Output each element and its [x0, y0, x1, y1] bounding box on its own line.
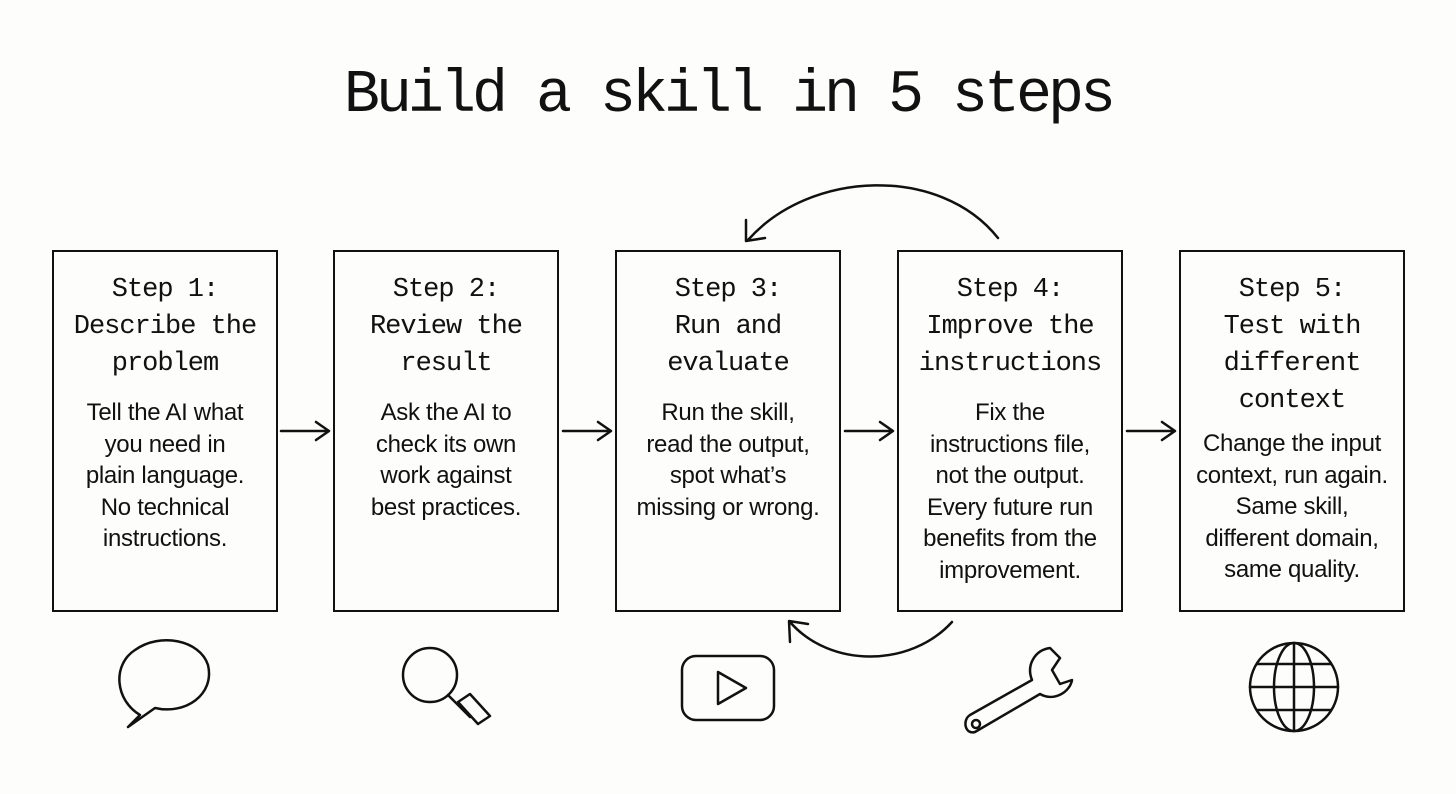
panel: step 3: missing or wrong.: [637, 494, 819, 520]
panel: step 4: [897, 250, 1123, 612]
panel: step 5: same quality.: [1224, 556, 1360, 583]
panel: step 5: different domain,: [1205, 524, 1379, 552]
arrow: loop bottom: [789, 621, 952, 656]
panel: step 3: Step 3:: [675, 275, 781, 305]
panel: step 4: instructions: [919, 349, 1101, 379]
panel: step 3: evaluate: [667, 349, 789, 379]
title: Build a skill in 5 steps: [344, 62, 1112, 130]
panel: step 1: problem: [112, 349, 218, 379]
panel: step 2: Ask the AI to: [381, 399, 511, 426]
panel: step 3: [615, 250, 841, 612]
panel: step 1: you need in: [105, 430, 225, 458]
panel: step 2: best practices.: [371, 494, 521, 520]
panel: step 5: context: [1239, 386, 1345, 416]
icon: globe: [1250, 643, 1338, 731]
icon: magnifier: [403, 648, 490, 724]
panel: step 4: improvement.: [939, 556, 1081, 584]
icon: play: [682, 656, 774, 720]
panel: step 1: instructions.: [103, 525, 227, 552]
panel: step 5: context, run again.: [1196, 462, 1388, 488]
panel: step 3: read the output,: [646, 430, 810, 458]
arrow: loop back top: [746, 185, 998, 241]
panel: step 2: [333, 250, 559, 612]
panel: step 4: Improve the: [926, 312, 1094, 342]
arrow 1-2: [281, 422, 329, 440]
panel: step 2: Step 2:: [393, 275, 499, 305]
panel: step 3: Run and: [675, 312, 781, 342]
panel: step 2: Review the: [370, 312, 522, 342]
panel: step 4: Fix the: [975, 399, 1045, 426]
panel: step 2: work against: [380, 462, 512, 489]
panel: step 4: not the output.: [936, 462, 1084, 489]
panel: step 1: [52, 250, 278, 612]
arrow 2-3: [563, 422, 611, 440]
arrow 4-5: [1127, 422, 1175, 440]
panel: step 5: Step 5:: [1239, 275, 1345, 305]
panel: step 3: spot what’s: [670, 462, 786, 489]
panel: step 5: different: [1224, 349, 1360, 379]
panel: step 2: result: [400, 349, 492, 379]
icon: speech bubble: [119, 640, 209, 727]
panel: step 2: check its own: [376, 430, 516, 458]
panel: step 5: Same skill,: [1236, 493, 1348, 520]
panel: step 1: Tell the AI what: [87, 399, 243, 426]
panel: step 1: Describe the: [74, 312, 256, 342]
icon: wrench: [965, 648, 1072, 732]
panel: step 4: instructions file,: [930, 430, 1090, 458]
panel: step 5: [1179, 250, 1405, 612]
panel: step 1: Step 1:: [112, 275, 218, 305]
panel: step 4: Every future run: [927, 494, 1093, 520]
panel: step 4: Step 4:: [957, 275, 1063, 305]
panel: step 3: Run the skill,: [661, 399, 795, 426]
arrow 3-4: [845, 422, 893, 440]
panel: step 4: benefits from the: [923, 525, 1097, 552]
panel: step 5: Change the input: [1203, 430, 1381, 457]
panel: step 1: No technical: [101, 494, 229, 520]
panel: step 5: Test with: [1224, 312, 1360, 342]
panel: step 1: plain language.: [86, 462, 244, 489]
